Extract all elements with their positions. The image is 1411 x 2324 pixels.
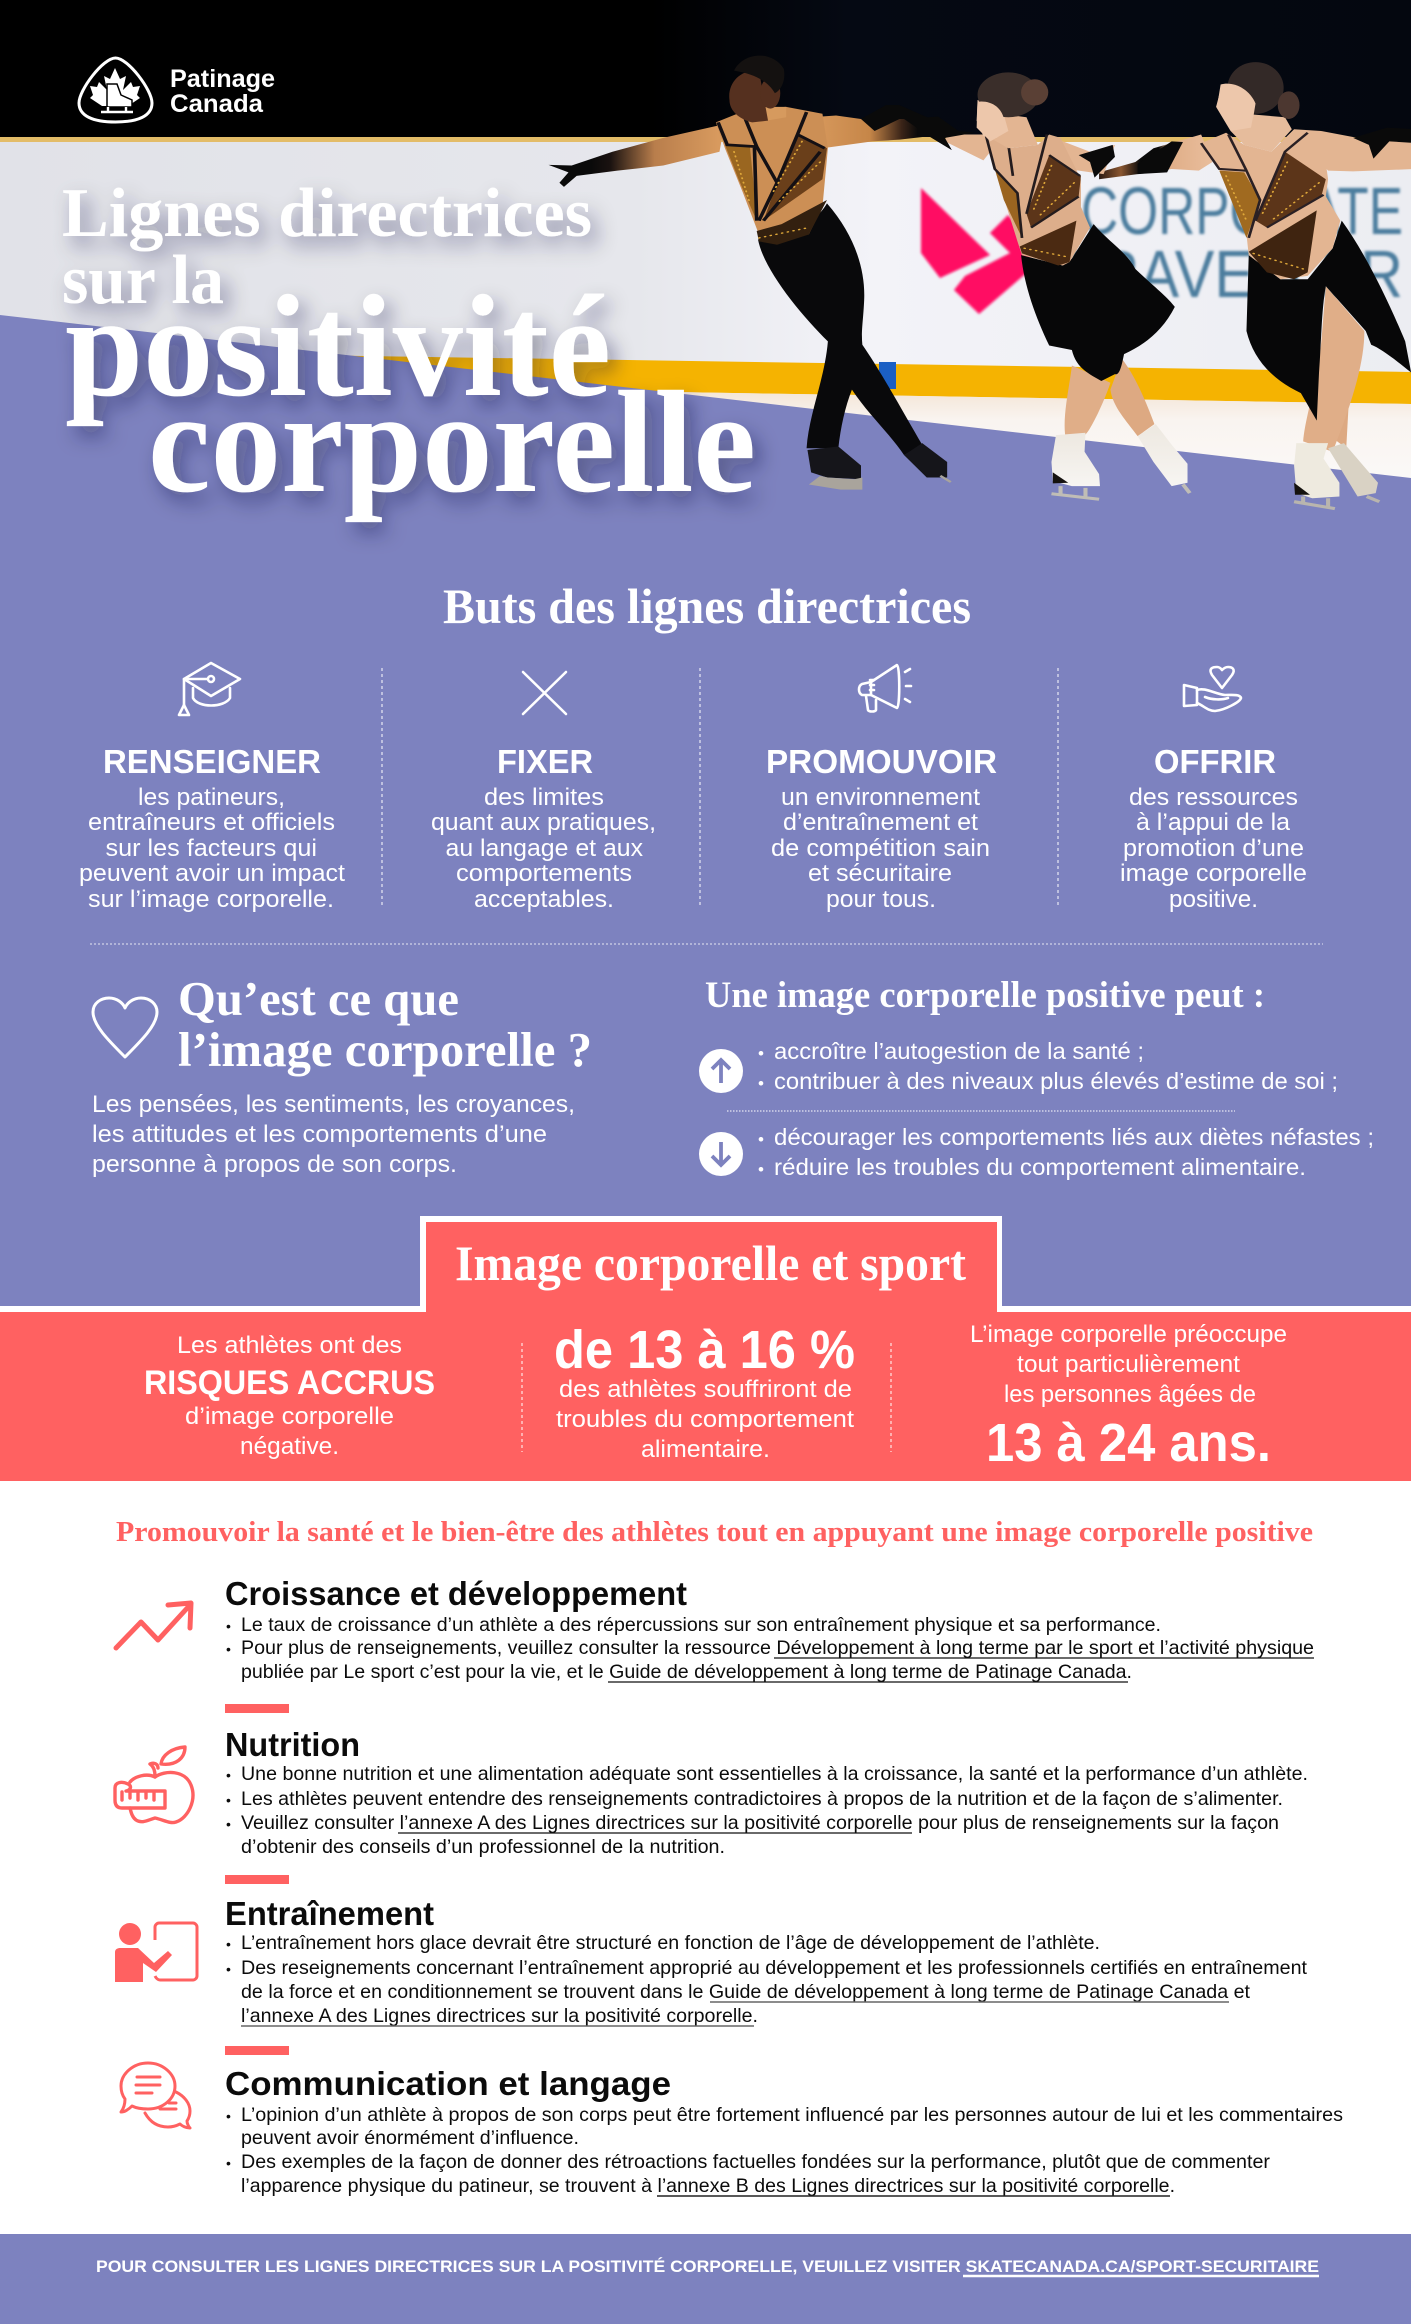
- illustration: three skaters: [549, 56, 1411, 509]
- description: et sécuritaire: [808, 860, 952, 887]
- description: [771, 784, 990, 913]
- heading: Image corporelle et sport: [455, 1235, 966, 1291]
- description: à l’appui de la: [1136, 809, 1291, 836]
- icon: growth arrow: [116, 1603, 191, 1648]
- banner: sponsor wordmark: [1060, 174, 1403, 312]
- label: FIXER: [497, 743, 593, 780]
- description: des limites: [484, 784, 604, 811]
- body text: •: [226, 1767, 231, 1783]
- body text: •: [226, 2155, 231, 2171]
- section: croissance et developpement: [116, 1575, 1314, 1683]
- panel: goal fixer: [431, 672, 656, 913]
- panel: image corporelle et sport band: [0, 1216, 1411, 1481]
- description: quant aux pratiques,: [431, 809, 656, 836]
- decrease list: décourager les comportements liés aux diètes néfastes ;: [774, 1124, 1374, 1150]
- body text: l’annexe A des Lignes directrices sur la positivité corporelle.: [241, 2005, 758, 2027]
- skater 1: [549, 56, 974, 490]
- increase list: •: [758, 1044, 764, 1063]
- decrease list: [758, 1124, 1374, 1180]
- label: PROMOUVOIR: [766, 743, 997, 780]
- body text: Des reseignements concernant l’entraînement approprié au développement et les professionnels certifiés en entraînement: [241, 1957, 1308, 1979]
- body text: peuvent avoir énormément d’influence.: [241, 2127, 579, 2149]
- description: acceptables.: [474, 886, 614, 913]
- body text: Le taux de croissance d’un athlète a des répercussions sur son entraînement physique et sa performance.: [241, 1614, 1161, 1636]
- body text: Veuillez consulter l’annexe A des Lignes directrices sur la positivité corporelle pour plus de renseignements sur la façon: [241, 1812, 1279, 1834]
- body text: publiée par Le sport c’est pour la vie, et le Guide de développement à long terme de Patinage Canada.: [241, 1661, 1132, 1683]
- stat: 13 a 24 ans: 13 à 24 ans.: [986, 1413, 1271, 1473]
- body text: •: [226, 1961, 231, 1977]
- description: un environnement: [781, 784, 980, 811]
- heading: Nutrition: [225, 1726, 360, 1763]
- body text: L’opinion d’un athlète à propos de son corps peut être fortement influencé par les personnes autour de lui et les commentaires: [241, 2104, 1343, 2126]
- body text: L’entraînement hors glace devrait être structuré en fonction de l’âge de développement de l’athlète.: [241, 1932, 1100, 1954]
- icon: skate and maple leaf badge: [79, 58, 152, 122]
- title: [62, 175, 756, 523]
- decrease list: •: [758, 1160, 764, 1179]
- stat: risques accrus: Les athlètes ont des: [177, 1332, 402, 1359]
- description: de compétition sain: [771, 835, 990, 862]
- body text: •: [226, 2108, 231, 2124]
- increase list: [758, 1038, 1338, 1094]
- heading: l’image corporelle ?: [178, 1022, 592, 1077]
- panel: hero photo background: [0, 0, 1411, 500]
- description: promotion d’une: [1123, 835, 1304, 862]
- heading: Croissance et développement: [225, 1575, 687, 1612]
- decrease list: réduire les troubles du comportement alimentaire.: [774, 1154, 1306, 1180]
- heading: promouvoir la sante: Promouvoir la santé et le bien-être des athlètes tout en appuyant une image corporelle positive: [116, 1516, 1313, 1548]
- increase list: accroître l’autogestion de la santé ;: [774, 1038, 1144, 1064]
- stat: 13 a 24 ans: les personnes âgées de: [1004, 1381, 1256, 1408]
- stat: de 13 a 16 %: troubles du comportement: [556, 1406, 854, 1433]
- skater 2: [904, 72, 1190, 499]
- heading: Une image corporelle positive peut :: [705, 975, 1265, 1016]
- definition: Les pensées, les sentiments, les croyances,: [92, 1091, 575, 1118]
- icon: trainer at board: [115, 1923, 197, 1982]
- body text: [226, 1932, 1308, 2027]
- description: image corporelle: [1120, 860, 1307, 887]
- body text: Des exemples de la façon de donner des rétroactions factuelles fondées sur la performance, plutôt que de commenter: [241, 2151, 1271, 2173]
- body text: •: [226, 1641, 231, 1657]
- icon: up arrow: [699, 1049, 743, 1093]
- description: [79, 784, 345, 913]
- body text: •: [226, 1936, 231, 1952]
- stat: risques accrus: négative.: [240, 1433, 339, 1460]
- description: peuvent avoir un impact: [79, 860, 345, 887]
- label: OFFRIR: [1154, 743, 1276, 780]
- body text: Les athlètes peuvent entendre des renseignements contradictoires à propos de la nutrition et de la façon de s’alimenter.: [241, 1788, 1283, 1810]
- body text: [226, 2104, 1343, 2197]
- definition: [92, 1091, 575, 1178]
- stat: risques accrus: RISQUES ACCRUS: [144, 1364, 435, 1402]
- stat: 13 a 24 ans: [970, 1321, 1287, 1473]
- description: les patineurs,: [138, 784, 285, 811]
- stat: 13 a 24 ans: tout particulièrement: [1017, 1351, 1240, 1378]
- definition: les attitudes et les comportements d’une: [92, 1121, 547, 1148]
- icon: speech bubbles: [121, 2063, 190, 2128]
- section: entrainement: [115, 1895, 1308, 2027]
- body text: [226, 1763, 1308, 1858]
- description: entraîneurs et officiels: [88, 809, 335, 836]
- icon: graduation cap: [179, 663, 240, 715]
- banner: pink sponsor logo: [921, 188, 1030, 314]
- stat: risques accrus: d’image corporelle: [185, 1403, 394, 1430]
- panel: purple main background: [0, 315, 1411, 1310]
- section: communication et langage: [121, 2063, 1343, 2197]
- panel: goal promouvoir: [766, 665, 997, 913]
- icon: heart: [93, 998, 157, 1057]
- body text: •: [226, 1618, 231, 1634]
- heading: Qu’est ce que: [178, 971, 459, 1026]
- icon: down arrow: [699, 1132, 743, 1176]
- title: corporelle: [148, 361, 756, 523]
- panel: goal offrir: [1120, 667, 1307, 913]
- body text: •: [226, 1792, 231, 1808]
- footer: [0, 2234, 1411, 2324]
- decrease list: •: [758, 1130, 764, 1149]
- heading: [178, 971, 592, 1077]
- description: d’entraînement et: [783, 809, 978, 836]
- description: positive.: [1169, 886, 1258, 913]
- logo wordmark: Patinage: [170, 65, 275, 93]
- stat: de 13 a 16 %: alimentaire.: [641, 1436, 770, 1463]
- logo wordmark: Canada: [170, 90, 264, 118]
- body text: de la force et en conditionnement se trouvent dans le Guide de développement à long terme de Patinage Canada et: [241, 1981, 1251, 2003]
- title: Lignes directrices: [62, 175, 592, 252]
- body text: Pour plus de renseignements, veuillez consulter la ressource Développement à long terme par le sport et l’activité physique: [241, 1637, 1314, 1659]
- icon: megaphone: [859, 665, 911, 712]
- stat: risques accrus: [144, 1332, 435, 1460]
- body text: •: [226, 1816, 231, 1832]
- section: nutrition: [115, 1726, 1308, 1858]
- description: comportements: [456, 860, 632, 887]
- heading: Communication et langage: [225, 2065, 671, 2102]
- stat: de 13 a 16 %: de 13 à 16 %: [554, 1320, 855, 1380]
- body text: l’apparence physique du patineur, se trouvent à l’annexe B des Lignes directrices sur la positivité corporelle.: [241, 2175, 1175, 2197]
- description: pour tous.: [826, 886, 936, 913]
- description: des ressources: [1129, 784, 1298, 811]
- description: sur les facteurs qui: [106, 835, 317, 862]
- icon: hand with heart: [1184, 667, 1241, 711]
- body text: d’obtenir des conseils d’un professionnel de la nutrition.: [241, 1836, 725, 1858]
- logo: Patinage Canada: [79, 58, 275, 122]
- panel: une image corporelle positive peut: [699, 975, 1374, 1180]
- logo wordmark: [170, 65, 275, 118]
- definition: personne à propos de son corps.: [92, 1151, 457, 1178]
- title: positivité: [65, 265, 611, 427]
- heading: Entraînement: [225, 1895, 434, 1932]
- description: sur l’image corporelle.: [88, 886, 334, 913]
- body text: Une bonne nutrition et une alimentation adéquate sont essentielles à la croissance, la santé et la performance d’un athlète.: [241, 1763, 1308, 1785]
- skater 3: [1099, 62, 1411, 509]
- description: [1120, 784, 1307, 913]
- icon: cross: [523, 672, 566, 714]
- body text: [226, 1614, 1314, 1683]
- stat: 13 a 24 ans: L’image corporelle préoccupe: [970, 1321, 1287, 1348]
- description: au langage et aux: [446, 835, 643, 862]
- increase list: contribuer à des niveaux plus élevés d’estime de soi ;: [774, 1068, 1338, 1094]
- panel: goal renseigner: [79, 663, 345, 913]
- icon: apple and tape measure: [115, 1747, 193, 1823]
- panel: qu'est-ce que l'image corporelle: [92, 971, 592, 1178]
- footer call to action: POUR CONSULTER LES LIGNES DIRECTRICES SUR LA POSITIVITÉ CORPORELLE, VEUILLEZ VISITER SKATECANADA.CA/SPORT-SECURITAIRE: [96, 2257, 1319, 2276]
- stat: de 13 a 16 %: des athlètes souffriront de: [559, 1376, 852, 1403]
- increase list: •: [758, 1074, 764, 1093]
- stat: de 13 a 16 %: [554, 1320, 855, 1463]
- heading: buts: Buts des lignes directrices: [443, 578, 971, 634]
- label: RENSEIGNER: [103, 743, 321, 780]
- description: [431, 784, 656, 913]
- title: sur la: [62, 242, 224, 319]
